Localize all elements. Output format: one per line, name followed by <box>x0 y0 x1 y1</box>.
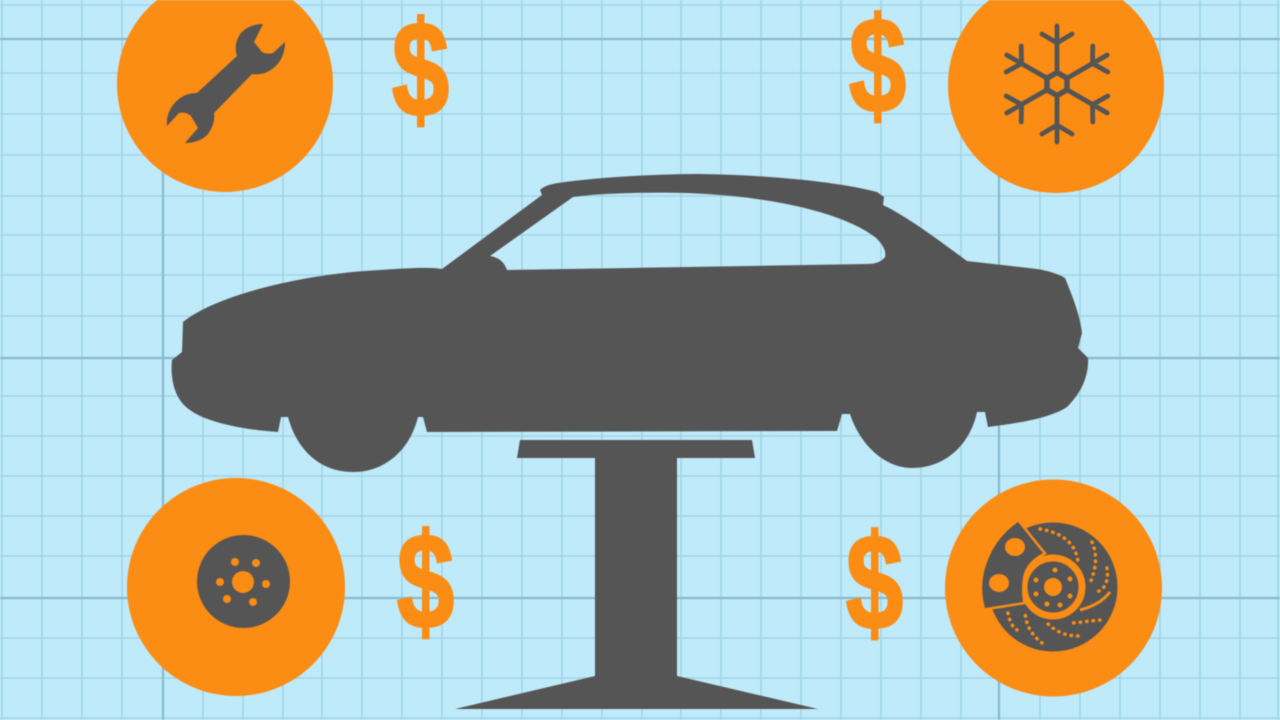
car lift <box>455 440 818 709</box>
dollar sign: bottom left: $ <box>397 505 454 657</box>
icon: snowflake in orange circle <box>948 0 1164 193</box>
brake disc <box>988 522 1118 652</box>
icon: wrench in orange circle <box>117 0 333 192</box>
snowflake glyph <box>999 26 1115 142</box>
wheel bolts <box>216 558 270 606</box>
caliper <box>982 522 1043 608</box>
wheel disc <box>197 535 290 628</box>
icon: brake disc and caliper in orange circle <box>945 480 1162 696</box>
hub <box>1024 558 1082 616</box>
disc perforations <box>1008 529 1107 643</box>
wrench glyph <box>167 24 285 143</box>
dollar sign: bottom right: $ <box>846 506 903 658</box>
car silhouette <box>172 174 1088 472</box>
icon: wheel hub in orange circle <box>127 478 345 696</box>
